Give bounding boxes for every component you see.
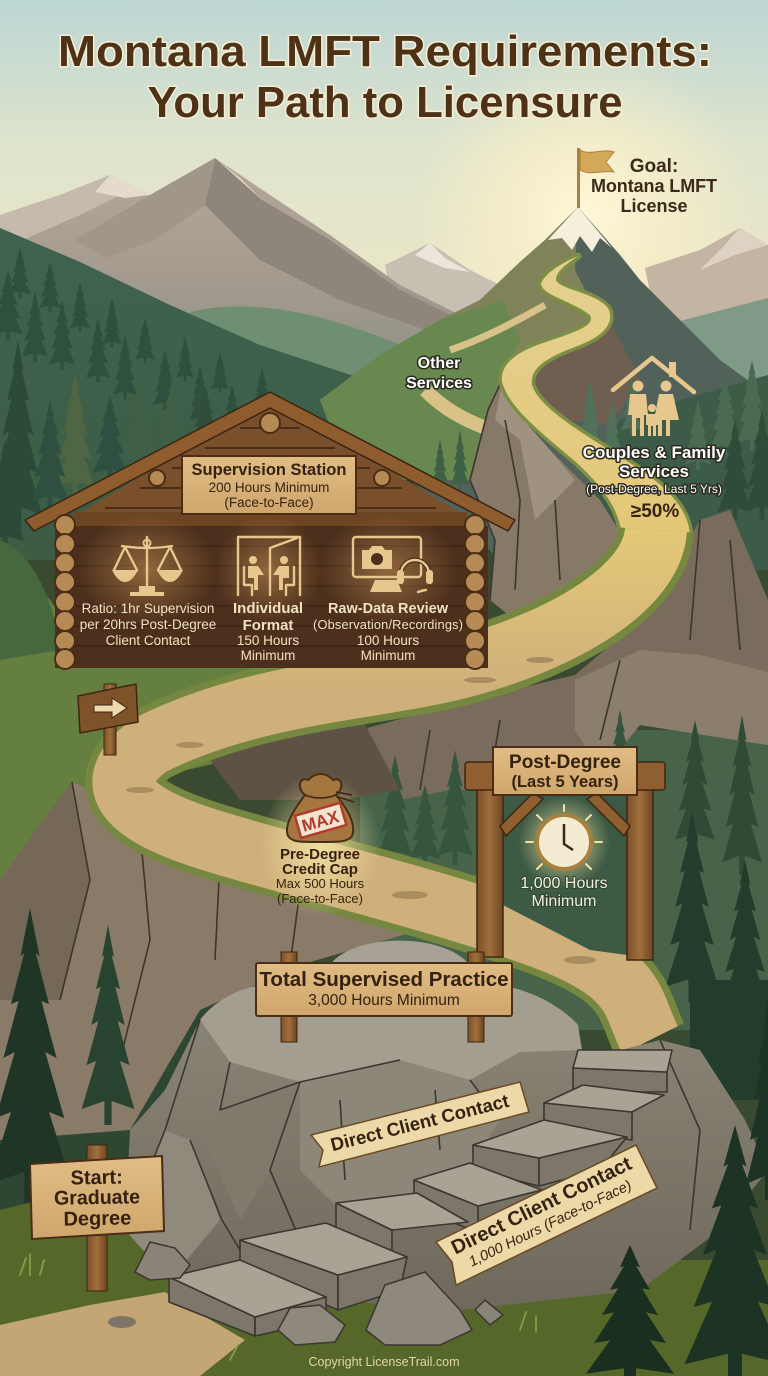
banner: direct client contact: [311, 1082, 529, 1167]
supervision station sign: 200 Hours Minimum: [209, 480, 329, 495]
step 5: [473, 1120, 627, 1186]
individual format text: 150 Hours: [237, 633, 299, 648]
background: foreground right trees: [586, 1000, 768, 1376]
background: left ground and lower cliff: [0, 540, 420, 1210]
ratio text: per 20hrs Post-Degree: [80, 617, 216, 632]
individual format text: Format: [243, 617, 293, 634]
icon: pre-degree money bag: [260, 773, 380, 917]
ratio text: Ratio: 1hr Supervision: [82, 601, 214, 616]
gate background forest: [503, 795, 627, 955]
stone staircase: [169, 1050, 672, 1336]
gate posts: [465, 762, 665, 960]
icon: individual session: [238, 537, 300, 595]
rock platform: [125, 941, 768, 1310]
icon: clock: [518, 796, 610, 888]
pre-degree credit cap text: [276, 846, 365, 906]
banner: direct client contact 1,000 hours: 1,000 Hours (Face-to-Face): [466, 1178, 634, 1270]
icon: goal flag: [577, 148, 614, 208]
background: sky: [0, 0, 768, 420]
background: bottom meadow: [0, 1180, 768, 1376]
raw-data review text: Minimum: [361, 648, 415, 663]
pre-degree credit cap text: Max 500 Hours: [276, 876, 365, 891]
background: central peak: [320, 207, 768, 560]
step 3: [336, 1193, 468, 1262]
panel: total supervised practice sign: [256, 952, 512, 1042]
background: right rock wall and lower forest: [340, 510, 768, 1100]
pre-degree credit cap text: Credit Cap: [282, 861, 358, 878]
individual format text: [233, 600, 303, 663]
ratio text: [80, 601, 216, 648]
couples and family services label: Services: [619, 462, 689, 481]
panel: post-degree timber gate: [465, 747, 665, 960]
banner: direct client contact 1,000 hours: [436, 1145, 657, 1285]
couples and family services label: (Post-Degree, Last 5 Yrs): [586, 482, 722, 496]
raw-data review text: Raw-Data Review: [328, 601, 449, 617]
supervision station sign: Supervision Station: [192, 461, 346, 479]
panel: supervision station cabin: [25, 392, 515, 669]
title: Montana LMFT Requirements:: [58, 27, 712, 76]
background: distant mountains: [0, 158, 768, 400]
icon: monitor, camera and headset: [353, 537, 433, 592]
cabin log ends: [55, 413, 485, 669]
post-degree sign: [493, 747, 637, 795]
icon: direction signpost: [78, 684, 138, 755]
pre-degree credit cap text: (Face-to-Face): [277, 891, 363, 906]
cabin wall: [55, 515, 488, 668]
other services label: Services: [406, 375, 472, 392]
panel: start sign: Degree: [63, 1207, 131, 1231]
couples and family services label: ≥50%: [631, 501, 679, 522]
cabin gable: [55, 398, 485, 528]
panel: start sign: [30, 1145, 164, 1291]
individual format text: Minimum: [241, 648, 295, 663]
post-degree hours text: Minimum: [532, 893, 596, 910]
icon: balance scale: [112, 537, 183, 596]
panel: start sign: Graduate: [54, 1186, 140, 1210]
background: forest behind the peak: [579, 360, 768, 570]
banner: direct client contact: Direct Client Contact: [328, 1090, 511, 1155]
background: foreground left trees: [0, 908, 134, 1208]
step 1: [169, 1260, 326, 1336]
other services label: Other: [418, 355, 460, 372]
couples and family services label: [583, 443, 726, 522]
ratio text: Client Contact: [106, 633, 191, 648]
supervision station sign: [182, 456, 356, 514]
background: green hillside and side trail: [320, 300, 545, 480]
post-degree hours text: 1,000 Hours: [520, 875, 608, 892]
panel: start sign: Start:: [70, 1167, 123, 1189]
post-degree hours text: [520, 875, 608, 910]
post-degree sign: (Last 5 Years): [511, 773, 619, 791]
icon: family under house roof: [613, 358, 694, 436]
step 7: [573, 1050, 672, 1092]
title: [58, 27, 712, 127]
copyright: Copyright LicenseTrail.com: [309, 1355, 459, 1369]
boulders: [135, 1242, 503, 1345]
goal label: [591, 156, 717, 216]
couples and family services label: Couples & Family: [583, 443, 726, 462]
goal label: License: [620, 196, 688, 216]
supervision station sign: (Face-to-Face): [224, 495, 314, 510]
banner: direct client contact 1,000 hours: Direct Client Contact: [448, 1153, 636, 1259]
cabin roof: [25, 392, 515, 531]
raw-data review text: 100 Hours: [357, 633, 419, 648]
goal label: Montana LMFT: [591, 176, 717, 196]
step 6: [544, 1085, 664, 1140]
panel: total supervised practice sign: Total Supervised Practice: [259, 968, 509, 991]
raw-data review text: (Observation/Recordings): [313, 617, 463, 632]
background: central cliff: [470, 378, 625, 640]
step 2: [240, 1223, 407, 1310]
goal label: Goal:: [630, 156, 678, 177]
other services label: [406, 355, 472, 392]
individual format text: Individual: [233, 600, 303, 617]
background: forested hills: [0, 228, 480, 560]
icon: pre-degree money bag: MAX: [300, 807, 342, 836]
background: left forest trees: [0, 340, 469, 550]
step 4: [414, 1163, 542, 1232]
title: Your Path to Licensure: [148, 78, 622, 127]
panel: total supervised practice sign: 3,000 Hours Minimum: [308, 992, 460, 1009]
post-degree sign: Post-Degree: [509, 752, 621, 773]
path: winding golden trail: [123, 256, 690, 1040]
pre-degree credit cap text: Pre-Degree: [280, 846, 360, 863]
raw-data review text: [313, 601, 463, 663]
